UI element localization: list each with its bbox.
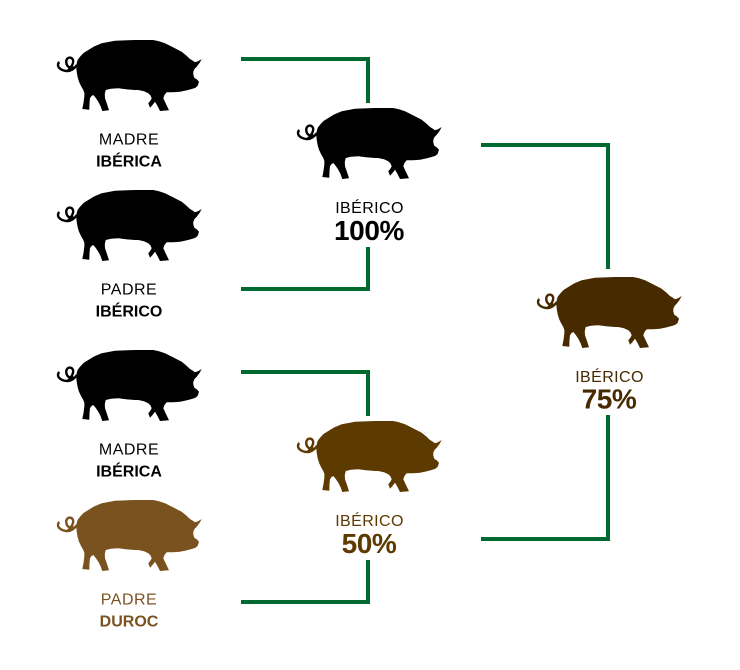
icon: darkest brown pig, ibérico 75% <box>538 277 682 348</box>
connector: ibérico 100% to ibérico 75% <box>481 145 608 269</box>
connector: madre ibérica to ibérico 50% <box>241 372 368 416</box>
label: madre ibérica: MADRE <box>99 132 159 148</box>
label: ibérico 75%: IBÉRICO <box>575 367 644 386</box>
label: padre duroc <box>100 592 159 630</box>
icon: black pig, madre ibérica <box>58 40 202 111</box>
icon: dark brown pig, ibérico 50% <box>298 421 442 492</box>
label: padre duroc: PADRE <box>101 592 157 608</box>
label: ibérico 75% <box>575 367 644 414</box>
label: padre ibérico: IBÉRICO <box>96 302 162 320</box>
label: madre ibérica: IBÉRICA <box>96 152 162 170</box>
label: madre ibérica second cross: IBÉRICA <box>96 462 162 480</box>
icon: black pig, ibérico 100% <box>298 108 442 179</box>
label: ibérico 100% <box>334 198 405 246</box>
connector: padre ibérico to ibérico 100% <box>241 247 368 289</box>
label: madre ibérica <box>96 132 162 170</box>
connector: ibérico 50% to ibérico 75% <box>481 415 608 539</box>
connector: padre duroc to ibérico 50% <box>241 560 368 602</box>
label: ibérico 50% <box>335 511 404 559</box>
connector: madre ibérica to ibérico 100% <box>241 59 368 103</box>
label: padre duroc: DUROC <box>100 614 159 630</box>
label: ibérico 100%: 100% <box>334 215 405 246</box>
icon: black pig, padre ibérico <box>58 190 202 261</box>
label: madre ibérica second cross <box>96 442 162 480</box>
icon: black pig, madre ibérica second cross <box>58 350 202 421</box>
label: ibérico 75%: 75% <box>582 384 637 414</box>
label: ibérico 50%: IBÉRICO <box>335 511 404 530</box>
icon: brown pig, padre duroc <box>58 500 202 571</box>
label: madre ibérica second cross: MADRE <box>99 442 159 458</box>
label: ibérico 50%: 50% <box>342 528 397 559</box>
label: padre ibérico <box>96 282 162 320</box>
label: padre ibérico: PADRE <box>101 282 157 298</box>
label: ibérico 100%: IBÉRICO <box>335 198 404 217</box>
